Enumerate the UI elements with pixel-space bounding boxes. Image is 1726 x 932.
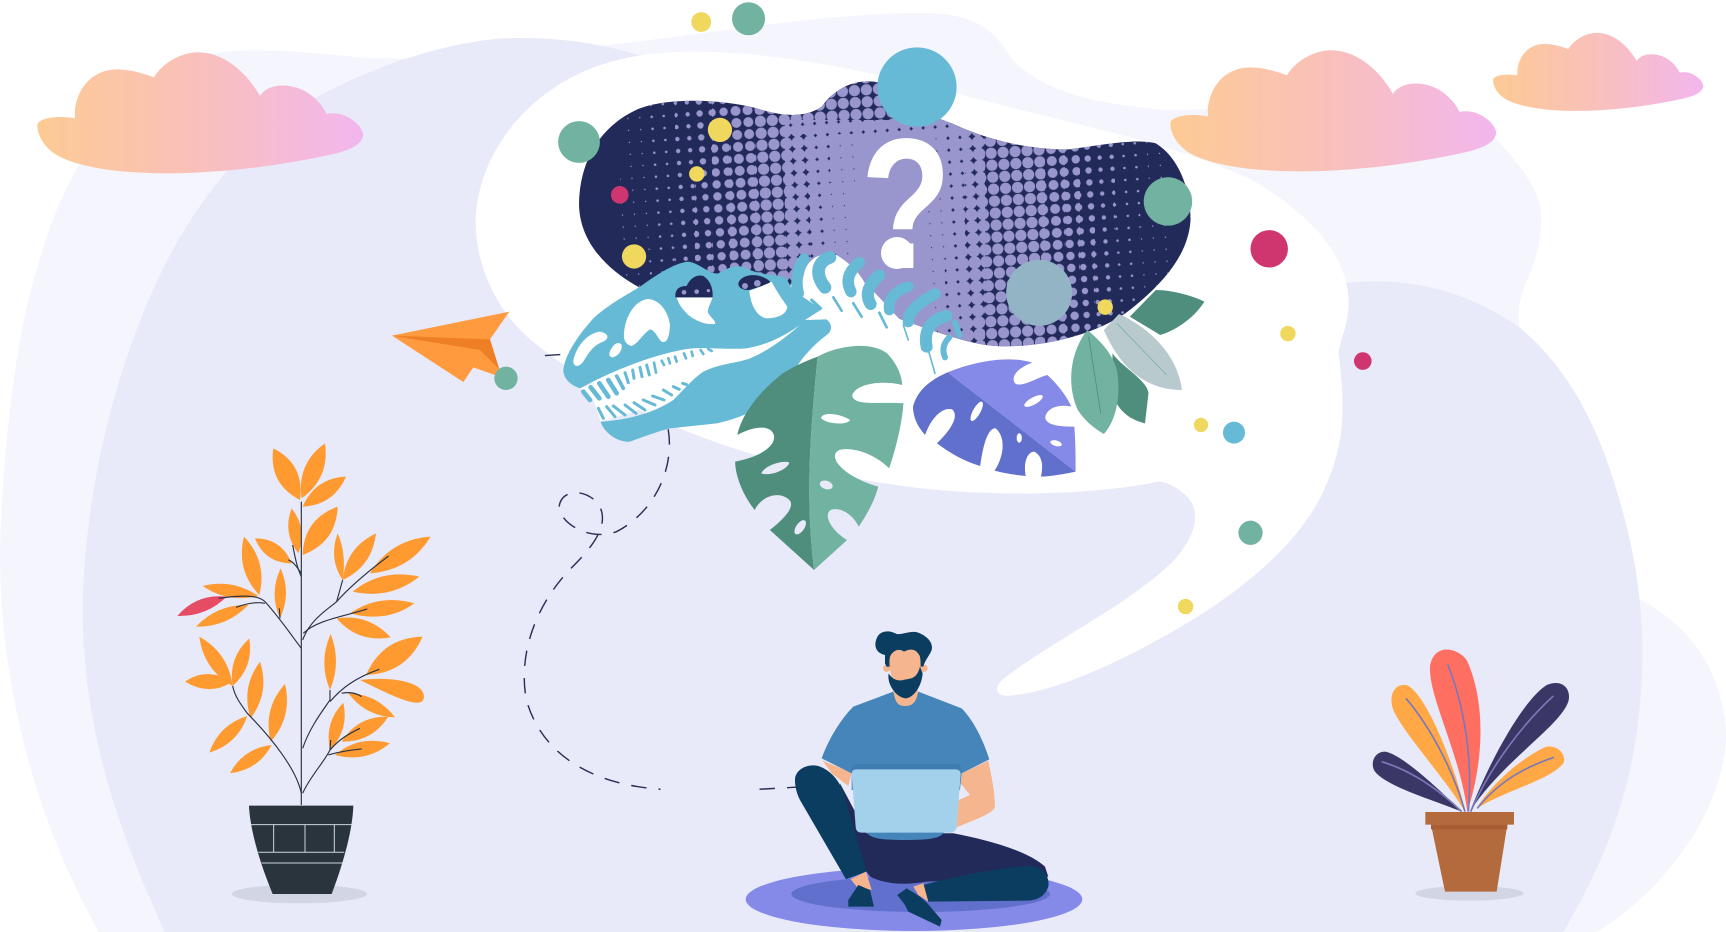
t-shirt [822,692,989,790]
raised leg [795,765,867,879]
monstera leaf: purple [913,359,1076,477]
monstera leaf: green [735,346,903,570]
cloud: middle right [1170,50,1496,171]
stems [218,502,389,805]
pot shadow [1415,886,1523,901]
dark halftone cloud [579,81,1191,346]
leaves behind the dark cloud [1112,290,1204,423]
man with laptop [746,631,1082,931]
top of cloud dots [785,81,942,120]
ankles [851,872,872,890]
rear skull opening [738,275,770,290]
shoes [848,885,874,907]
decorative dots [558,2,1372,614]
lower teeth [598,383,687,418]
cloud: far right [1493,33,1703,111]
vertebrae [797,257,959,373]
pot shadow [232,885,367,903]
trousers [840,783,1048,884]
potted plant: right [1373,650,1569,901]
leaves [1373,752,1462,812]
dark pot [249,806,353,894]
terracotta pot [1431,825,1507,892]
upper teeth [583,349,712,400]
red leaf [177,596,227,616]
cloud: left [37,52,363,173]
dashed flight path [524,354,798,789]
head [883,665,890,672]
eye opening [677,297,715,324]
right leaf cluster [1071,314,1182,434]
leaves [185,443,431,773]
lower leg [923,866,1049,902]
speech bubble [476,52,1349,696]
dinosaur skeleton [563,254,959,442]
nasal openings [573,332,607,366]
laptop [867,832,944,840]
mouth [580,325,800,422]
arms [957,761,995,827]
paper plane [392,312,518,390]
question mark: ? [861,100,951,308]
floor rug [746,868,1082,931]
neck [893,690,918,706]
orange plant [177,443,431,903]
leaf veins [1382,664,1554,812]
spine white underlay [793,254,927,383]
skull and jaw [563,262,831,442]
